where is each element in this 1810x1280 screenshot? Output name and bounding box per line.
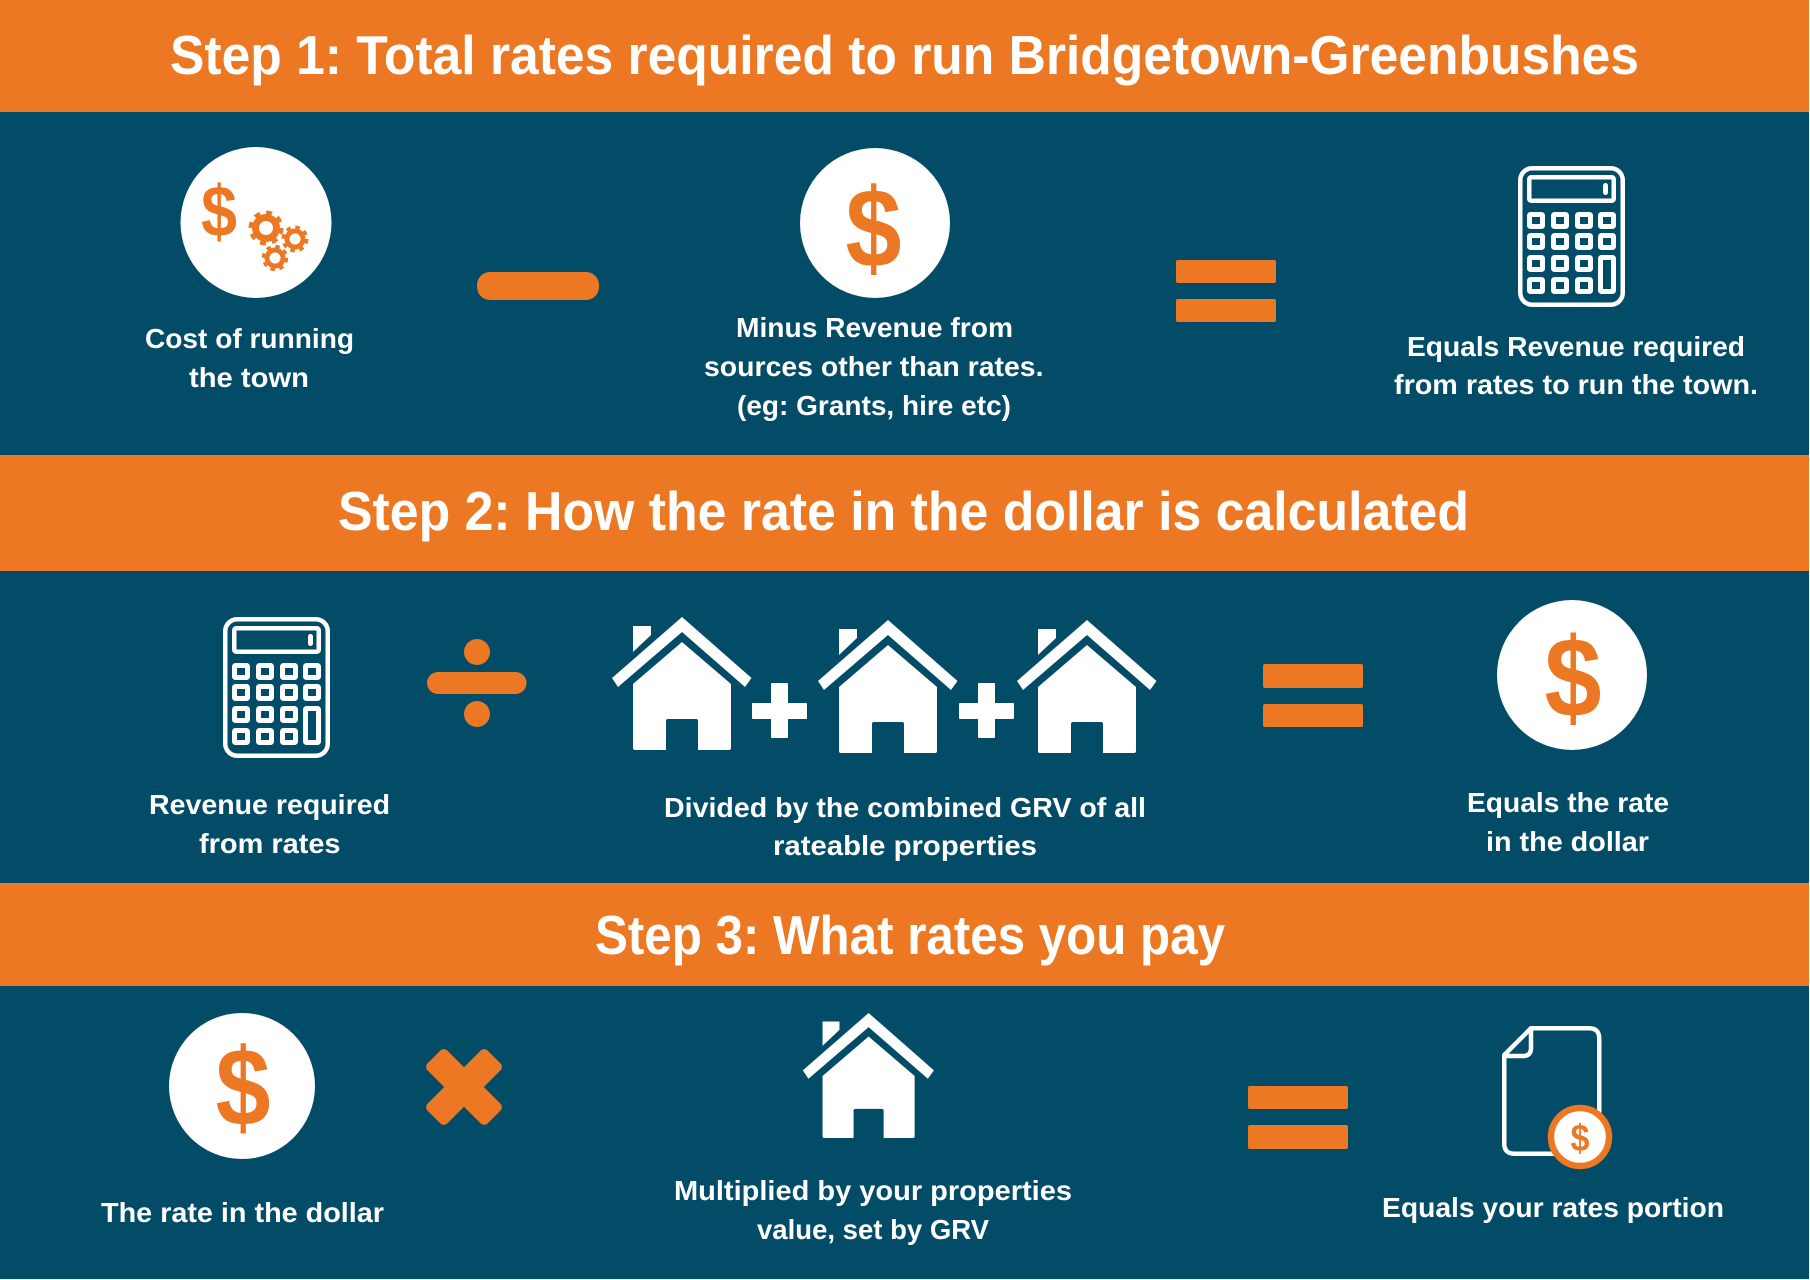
icon: dollar coin: $	[216, 1026, 270, 1150]
panel: step 1	[0, 0, 1809, 455]
operator: minus	[477, 272, 599, 300]
label: revenue required from rates	[149, 789, 390, 859]
icon: dollar and gears coin	[180, 147, 332, 298]
label: equals your rates portion: Equals your rates portion	[1382, 1192, 1724, 1223]
label: multiplied by property value: Multiplied by your properties	[674, 1175, 1072, 1206]
icon: house	[803, 1013, 934, 1138]
operator: equals	[1248, 1086, 1348, 1149]
label: minus revenue from other sources	[704, 312, 1044, 421]
label: cost of running the town	[145, 323, 354, 393]
label: divided by combined GRV	[664, 792, 1146, 861]
icon: document with dollar coin	[1504, 1028, 1609, 1166]
label: equals revenue required from rates: from rates to run the town.	[1394, 369, 1758, 400]
label: divided by combined GRV: Divided by the combined GRV of all	[664, 792, 1146, 823]
operator: multiply	[424, 1047, 504, 1127]
icon: dollar coin: $	[846, 166, 902, 290]
label: divided by combined GRV: rateable properties	[773, 830, 1037, 861]
label: multiplied by property value	[674, 1175, 1072, 1245]
label: minus revenue from other sources: sources other than rates.	[704, 351, 1044, 382]
icon: dollar coin	[800, 148, 950, 298]
icon: document with dollar coin: $	[1570, 1118, 1590, 1160]
heading bar: step 3: Step 3: What rates you pay	[595, 904, 1225, 966]
label: cost of running the town: Cost of running	[145, 323, 354, 354]
label: equals the rate in the dollar: Equals the rate	[1467, 787, 1669, 818]
operator: equals	[1176, 260, 1276, 322]
label: the rate in the dollar: The rate in the dollar	[101, 1197, 384, 1228]
icon: dollar coin	[1497, 600, 1647, 750]
icon: calculator	[225, 619, 328, 756]
operator: divide	[427, 639, 526, 727]
icon: dollar and gears coin: $	[201, 172, 237, 252]
heading bar: step 3	[0, 883, 1809, 986]
heading bar: step 2	[0, 455, 1809, 571]
label: cost of running the town: the town	[189, 362, 309, 393]
operator: equals	[1263, 664, 1363, 727]
heading bar: step 1: Step 1: Total rates required to run Bridgetown-Greenbushes	[170, 24, 1639, 86]
icon: three houses joined by plus signs	[612, 617, 1156, 753]
icon: calculator	[1520, 168, 1623, 305]
label: equals revenue required from rates	[1394, 331, 1758, 400]
heading bar: step 1	[0, 0, 1809, 112]
label: equals the rate in the dollar: in the dollar	[1486, 826, 1649, 857]
label: equals revenue required from rates: Equals Revenue required	[1407, 331, 1745, 362]
label: multiplied by property value: value, set by GRV	[757, 1214, 989, 1245]
panel: step 2	[0, 455, 1809, 883]
label: revenue required from rates: from rates	[199, 828, 340, 859]
label: equals the rate in the dollar	[1467, 787, 1669, 857]
heading bar: step 2: Step 2: How the rate in the dollar is calculated	[338, 480, 1469, 542]
label: minus revenue from other sources: (eg: Grants, hire etc)	[737, 390, 1011, 421]
panel: step 3	[0, 883, 1809, 1279]
icon: dollar coin	[169, 1013, 315, 1159]
label: minus revenue from other sources: Minus Revenue from	[736, 312, 1013, 343]
label: revenue required from rates: Revenue required	[149, 789, 390, 820]
icon: dollar coin: $	[1544, 614, 1602, 742]
